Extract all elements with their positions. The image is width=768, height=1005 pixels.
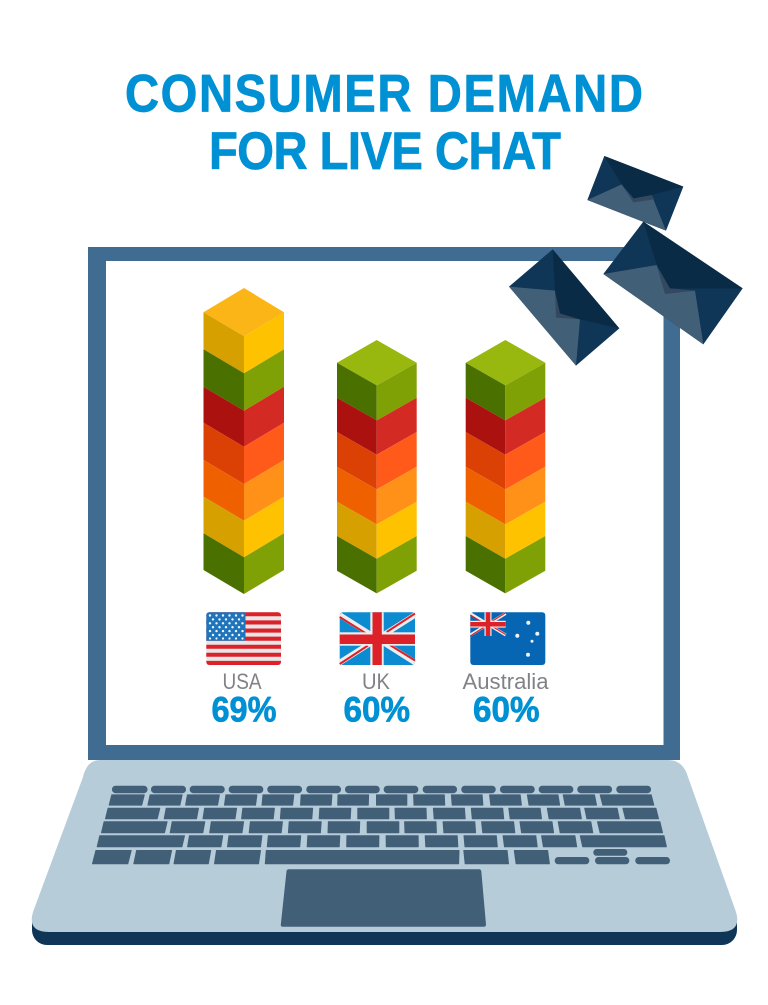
bar chart: USA column (204, 288, 284, 594)
icon: UK flag (340, 612, 415, 665)
keyboard (92, 786, 670, 864)
label: Australia: Australia (462, 669, 549, 694)
keyboard: row 1 (109, 795, 654, 805)
keyboard: row 3 (102, 822, 662, 833)
keyboard: bottom row (92, 850, 549, 864)
keyboard: row 4 (97, 836, 666, 847)
trackpad (281, 869, 486, 927)
icon: USA flag (206, 612, 281, 665)
bar chart: UK column (337, 340, 417, 593)
keyboard: row 2 (106, 808, 658, 819)
laptop base (32, 760, 737, 945)
title (125, 64, 643, 181)
icon: envelope right (603, 222, 743, 344)
keyboard: arrow keys (555, 850, 670, 864)
keyboard: function row (112, 786, 650, 793)
label: UK: UK (362, 669, 390, 694)
value: UK 60%: 60% (344, 691, 410, 730)
value: USA 69%: 69% (212, 691, 276, 730)
laptop screen (88, 247, 680, 760)
bar chart: Australia column (466, 340, 545, 593)
title: CONSUMER DEMAND (125, 64, 643, 123)
icon: envelope top (587, 156, 683, 231)
title: FOR LIVE CHAT (209, 121, 561, 181)
label: USA: USA (222, 669, 262, 694)
value: Australia 60%: 60% (473, 691, 540, 730)
icon: Australia flag (470, 612, 545, 665)
icon: envelope left (509, 249, 619, 366)
